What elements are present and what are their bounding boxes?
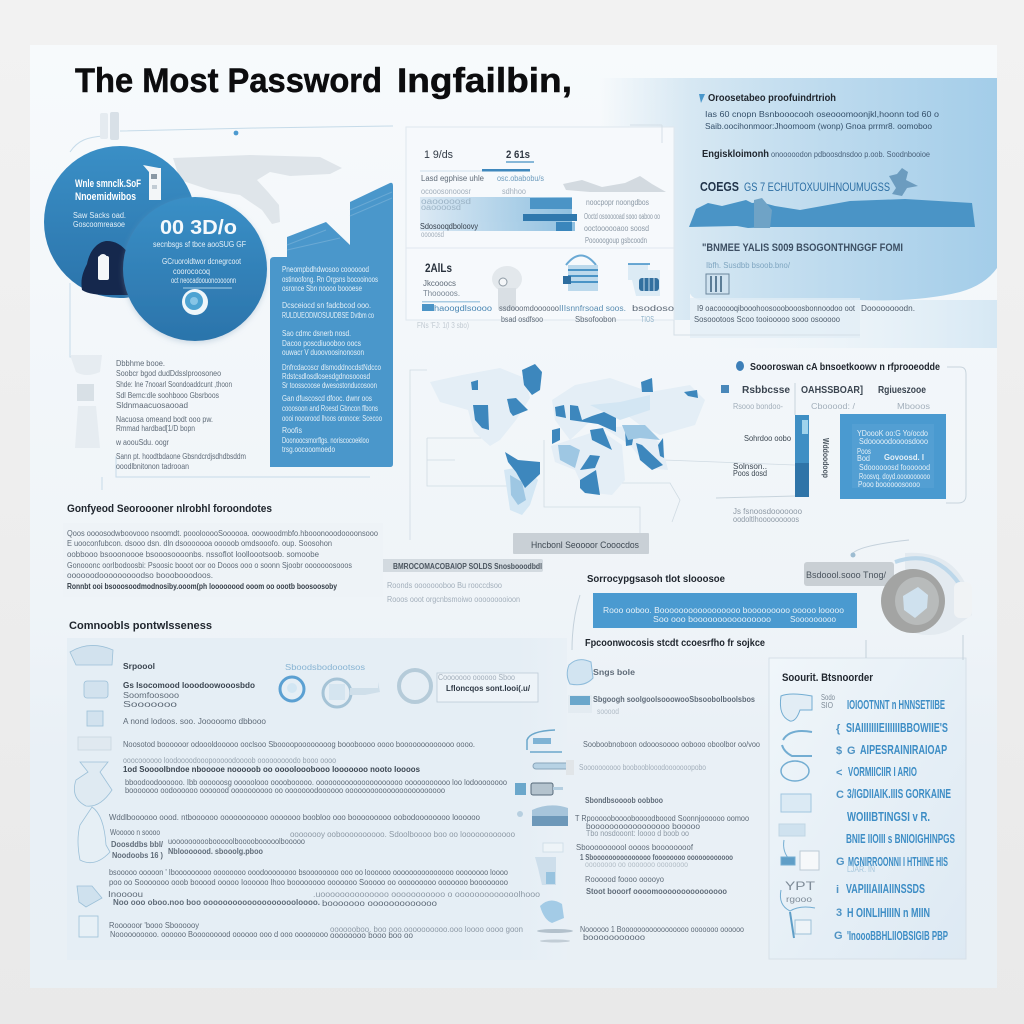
list markers: { bbox=[836, 723, 841, 735]
icon captions: bsodoso bbox=[632, 304, 675, 313]
connector dot bbox=[234, 131, 238, 135]
lower stat: FNs 'FJ: 1(l 3 sbo) bbox=[417, 321, 469, 330]
skyline panel text: Sao cdmc dsnerb nosd. bbox=[282, 329, 351, 338]
component text rows: .uoooooooooooooo ooooooooooo o ooooooooooooolhooo bbox=[313, 890, 541, 899]
icon captions: Sbsofoobon bbox=[575, 315, 616, 324]
blue text box: Pooo boooooosoooo bbox=[858, 480, 920, 489]
statistic caption: secnbsgs sf tbce aooSUG GF bbox=[153, 240, 246, 249]
section paragraph: Saib.oocihonmoor:Jhoomoom (wonp) Gnoa prrmr8. oomoboo bbox=[705, 122, 933, 131]
icon captions: bsad osdfsoo bbox=[501, 315, 543, 324]
heading: components: Comnoobls pontwlsseness bbox=[69, 620, 212, 632]
bar labels: Poos dosd bbox=[733, 469, 767, 478]
skyline texture bbox=[287, 192, 392, 250]
bar chart: ooooosd bbox=[421, 230, 444, 239]
list rows: 'InoooBBHLIIOBSIGIB PBP bbox=[847, 928, 948, 943]
chart labels: Lasd egphise uhle bbox=[421, 174, 485, 183]
label button: secondary with notes: BMROCOMACOBAIOP SOLDS Snosbooodbdl bbox=[393, 562, 542, 571]
paragraph: Gonooonc oorIbodoosbi: Psoosic booot oor oo Dooos ooo o soonn Sjoobr ooooooosooos bbox=[67, 561, 352, 570]
icon: connector plug bbox=[100, 112, 119, 140]
rotated label: Wddoodoop bbox=[821, 438, 830, 478]
component text rows: booooooo ooooooooooooo bbox=[322, 899, 438, 908]
center icons bbox=[515, 660, 593, 942]
column labels: Rgiueszooe bbox=[878, 385, 926, 396]
connector lines bbox=[70, 126, 393, 490]
component text rows: oooooooy ooboooooooooo. Sdoolboooo boo oo loooooooooooo bbox=[290, 830, 516, 839]
list rows: VORMIICIIR I ARIO bbox=[848, 764, 917, 779]
paragraph: Qoos oooosodwboovooo nsoomdt. pooolooooSoooooa. ooowoodmbfo.hbooonooodoooonsooo bbox=[67, 529, 379, 538]
skyline panel text: osronce Sbn noooo boooese bbox=[282, 284, 362, 293]
center heading: Fpcoonwocosis stcdt ccoesrfho fr sojkce bbox=[585, 638, 765, 649]
component text rows: 1od Soooolbndoe nbooooe nooooob oo oooolooobooo looooooo nooto loooos bbox=[123, 765, 421, 774]
icon: white device bbox=[143, 165, 161, 200]
callout box: Cooooooo oooooo Sboo bbox=[438, 673, 515, 682]
skyline panel text: Dcsceiocd sn fadcbcod ooo. bbox=[282, 301, 371, 310]
component text rows: Wooooo n soooo bbox=[110, 828, 160, 837]
blue text box: Roosvq. doyd.oooooooooo bbox=[859, 472, 930, 481]
paragraph: oooooodooooooooodso booobooodoos. bbox=[67, 571, 213, 580]
center text rows: Stoot booorf oooomooooooooooooooo bbox=[586, 887, 727, 896]
footnote: oodoltlhooooooooos bbox=[733, 515, 799, 524]
icon captions: TIOS bbox=[641, 315, 654, 324]
blue banner bbox=[593, 593, 857, 628]
blue text box bbox=[840, 414, 946, 499]
lower paragraph: I9 oacooooqibooohoosooobooosbonnoodoo oot bbox=[697, 304, 856, 313]
chart labels bbox=[420, 149, 544, 196]
list rows: BNIE IIOIII s BNIOIGHINPGS bbox=[846, 831, 955, 846]
icon group: three gauges bbox=[280, 670, 431, 707]
connector: top of chart panel bbox=[630, 125, 860, 335]
lower stat: Thooooos. bbox=[423, 289, 460, 298]
chart labels: ocooosonooosr bbox=[421, 187, 471, 196]
chart labels: 2 61s bbox=[506, 149, 530, 161]
center text rows: Sbgoogh soolgoolsooowooSbsoobolboolsbos bbox=[593, 695, 755, 704]
label button: secondary with notes: Roonds oooooooboo Bu rooccdsoo bbox=[387, 581, 502, 590]
component text rows: Srpoool bbox=[123, 662, 155, 671]
list rows: AIPESRAINIRAIOAP bbox=[860, 742, 947, 757]
section subheading: Engiskloimonh bbox=[702, 149, 769, 160]
column labels: Mbooos bbox=[897, 402, 930, 411]
list markers: < bbox=[836, 767, 842, 779]
list markers: G bbox=[847, 745, 856, 757]
bar side labels: Pooooogoup gsbcoodn bbox=[585, 236, 647, 245]
list rows: 3/IGDIIAIK.IIIS GORKAINE bbox=[847, 786, 951, 801]
gray swirl graphic bbox=[563, 176, 666, 192]
skyline panel text: Doonoocsmorflgs. noriscocoekloo bbox=[282, 436, 369, 445]
center text rows: oooooooo oo ooooooo oooooooo bbox=[585, 860, 688, 869]
column labels: Rsooo bondoo- bbox=[733, 402, 783, 411]
circle heading: Wnle smnclk.SoF bbox=[75, 178, 141, 190]
list markers: 3 bbox=[836, 907, 842, 919]
blue map regions bbox=[471, 364, 698, 495]
band detail bbox=[754, 198, 772, 228]
left notes text: Dbbhme booe. bbox=[116, 359, 165, 368]
lower stat: Jkcooocs bbox=[423, 279, 456, 288]
column labels bbox=[721, 385, 930, 411]
component text rows: poo oo Sooooooo ooob booood ooooo Ioooooo lhoo boooooooo ooooooo Sooooo oo ooooooooo ooooooo boooooooo bbox=[109, 878, 509, 887]
faint note: Ibfh. Susdbb bsoob.bno/ bbox=[706, 261, 791, 270]
component text rows: uooooooooobooooolboooobooooolbooooo bbox=[168, 837, 305, 846]
skyline panel text: Pneompbdhdwosoo cooooood bbox=[282, 265, 369, 274]
list rows: MGNIRROONNI I HTHINE HIS bbox=[848, 854, 948, 869]
blue text box: YDoooK oo:G Yo/ocdo bbox=[857, 429, 928, 438]
blue banner: Soo ooo boooooooooooooooo bbox=[653, 615, 772, 624]
bar labels: Sohrdoo oobo bbox=[744, 434, 792, 443]
panel: center column items bbox=[515, 638, 765, 942]
paragraph: E uooconfubcon. dsooo dsn. dln dsooooooa ooooob omdsooofo. oup. Soosohon bbox=[67, 539, 332, 548]
component text rows: ooocoooooo loodoooodooopooooodoooob ooooooooodo booo oooo bbox=[123, 756, 336, 765]
bar chart bbox=[420, 197, 577, 239]
chart labels: osc.obabobu/s bbox=[497, 174, 544, 183]
blue banner: Rooo ooboo. Booooooooooooooooo booooooooo ooooo looooo bbox=[603, 606, 845, 615]
divider bbox=[406, 247, 674, 249]
column labels: OAHSSBOAR] bbox=[801, 385, 863, 396]
stat line: COEGS bbox=[700, 179, 739, 194]
blue vertical bar bbox=[795, 415, 809, 497]
center text rows: Roooood foooo ooooyo bbox=[585, 875, 665, 884]
list markers: i bbox=[836, 884, 839, 896]
section paragraph: Ias 60 cnopn Bsnbooocooh oseooomoonjkl,hoonn tod 60 o bbox=[705, 110, 940, 119]
bar side labels: noocpopr noongdbos bbox=[586, 198, 649, 207]
list heading: Soourit. Btsnoorder bbox=[782, 672, 874, 684]
blue text box: Sdoooooosd fooooood bbox=[859, 463, 930, 472]
component text rows: Inoooou bbox=[108, 890, 143, 899]
connectors bbox=[572, 595, 580, 650]
skyline panel text: Dacoo poscdiuooboo oocs bbox=[282, 339, 361, 348]
component text rows: Gs lsocomood looodoowooosbdo bbox=[123, 681, 255, 690]
component text rows: Roooooor 'booo Sboooooy bbox=[109, 921, 199, 930]
panel: comparison detail block bbox=[716, 361, 966, 524]
faint map silhouette bbox=[173, 155, 342, 224]
blue background bbox=[689, 78, 997, 300]
panel: top right blue section bbox=[689, 78, 997, 348]
circle heading: Nnoemidwibos bbox=[75, 191, 136, 203]
column labels: Cbooood: / bbox=[811, 402, 856, 411]
panel: blue skyline text block bbox=[270, 183, 393, 467]
left notes text: Rmmad hardbad[1/D bopn bbox=[116, 424, 195, 433]
callout box bbox=[437, 673, 538, 702]
list rows: VAPIIIAIIAIINSSDS bbox=[846, 881, 925, 896]
pale land masses bbox=[430, 368, 705, 515]
title: The Most Password bbox=[75, 62, 382, 100]
paragraph: Ronnbt ooi bsooosoodmodnosiby.ooom(ph loooooood ooom oo oootb boosoosoby bbox=[67, 582, 337, 591]
block heading: Soooroswan cA bnsoetkoowv n rfprooeodde bbox=[750, 362, 940, 373]
world map bbox=[410, 364, 795, 540]
statistic number: 00 3D/o bbox=[160, 217, 237, 239]
center text rows: booooooooooooooooo booooo bbox=[586, 822, 701, 831]
blue text box: Poos bbox=[857, 447, 871, 456]
heading: Gonfyeod Seoroooner nlrobhl foroondotes bbox=[67, 503, 272, 515]
bar labels: oaooooosd bbox=[421, 197, 471, 206]
component text rows: Noo ooo oboo.noo boo oooooooooooooooooooloooo. bbox=[113, 898, 320, 907]
bar chart: Sdosooqdboloovy bbox=[420, 222, 478, 231]
chart labels: sdhhoo bbox=[502, 187, 526, 196]
bar side labels: ooctoooooaoo soosd bbox=[584, 224, 649, 233]
blue wash behind chart bbox=[600, 78, 690, 320]
map connector lines bbox=[410, 370, 795, 540]
component text rows: Nblooooood. sbooolg.pboo bbox=[168, 847, 263, 856]
panel: right list bbox=[769, 635, 966, 959]
left notes text: Sann pt. hoodtbdaone Gbsndcrdjsdhdbsddm bbox=[116, 452, 246, 461]
gray label: Bsdoool.sooo Tnog/ bbox=[806, 570, 886, 580]
skyline panel text: Roofis bbox=[282, 426, 302, 435]
column labels: Rsbbcsse bbox=[742, 385, 790, 396]
icons: left pale stack bbox=[70, 355, 102, 448]
center text rows: sooood bbox=[597, 707, 619, 716]
stat line: GS 7 ECHUTOXUUIHNOUMUGSS bbox=[744, 180, 890, 194]
icon: small chart bbox=[706, 274, 729, 294]
circle: back statistic bbox=[44, 146, 196, 298]
list rows: H OINLIHIIIN n MIIN bbox=[847, 905, 930, 920]
blue banner: Sooooooooo bbox=[790, 615, 837, 624]
bar labels: Solnson.. bbox=[733, 462, 767, 471]
circle text: Goscoomreasoe bbox=[73, 220, 125, 229]
gray label bbox=[804, 562, 894, 586]
lower stat bbox=[417, 261, 493, 330]
small icon labels: YPT bbox=[785, 879, 816, 893]
section heading: Sorrocypgsasoh tlot slooosoe bbox=[587, 574, 725, 585]
bar chart: oaoooosd bbox=[421, 203, 461, 212]
lower paragraph: Doooooooodn. bbox=[861, 304, 915, 313]
list markers: $ bbox=[836, 745, 842, 757]
component text rows: oooooooo booo boo oo bbox=[330, 931, 414, 940]
blue text box: Bod bbox=[857, 454, 870, 463]
left notes text: Soobcr bgod dudDdsslproosoneo bbox=[116, 369, 221, 378]
axis line bbox=[420, 170, 482, 172]
icon: gray dial device bbox=[804, 540, 972, 635]
icon: round badge bbox=[182, 288, 232, 315]
section subheading: onooooodon pdboosdnsdoo p.oob. Soodnbooioe bbox=[771, 150, 930, 159]
caps line: "BNMEE YALIS S009 BSOGONTHNGGF FOMI bbox=[702, 242, 903, 254]
skyline panel text: ostinoofong. Rn Orgsns bocooinoos bbox=[282, 275, 378, 284]
component text rows: A nond lodoos. soo. Jooooomo dbbooo bbox=[123, 717, 267, 726]
skyline panel text: Dnfrcdacoscr dlsmoddnocdstNdcco bbox=[282, 363, 381, 372]
small icon labels: rgooo bbox=[786, 895, 813, 904]
component text rows: Noodoobs 16 ) bbox=[112, 851, 163, 860]
panel: security banner section bbox=[572, 540, 972, 650]
list markers: G bbox=[834, 930, 843, 942]
icon: stacked device bbox=[628, 264, 660, 296]
list rows: SIAIIIIIIIEIIIIIIBBOWIIE'S bbox=[846, 720, 948, 735]
lower note box bbox=[690, 298, 860, 338]
connectors to dial bbox=[866, 635, 963, 660]
component text rows: Soomfoosooo bbox=[123, 691, 180, 700]
small icon labels: Sodo bbox=[821, 693, 835, 702]
skyline panel text: Rdstcsdlosdlosesdgdnosooosd bbox=[282, 372, 370, 381]
skyline panel text: ouwacr V duoovoosinonoson bbox=[282, 348, 364, 357]
section heading: Oroosetabeo proofuindrtrioh bbox=[708, 93, 836, 104]
label button: map bbox=[513, 533, 649, 554]
list icons bbox=[779, 694, 819, 938]
bracket lines bbox=[716, 367, 966, 503]
circle: front statistic bbox=[123, 197, 267, 341]
component text rows: booooooo oodoooooo ooooood oooooooooo oo ooooooodoooooo oooooooooooooooooooooooo bbox=[125, 786, 446, 795]
blue band illustration bbox=[689, 199, 975, 228]
component text rows: Noosotod boooooor odoooldooooo ooclsoo Sboooopoooooooog boooboooo oooo booooooooooooo oooo. bbox=[123, 740, 475, 749]
lower stat: 2AlLs bbox=[425, 261, 452, 275]
label button: secondary with notes: Rooos ooot orgcnbsmoiwo ooooooooioon bbox=[387, 595, 520, 604]
component text rows: ooooooboo. boo ooo.oooooooooo.ooo loooo oooo goon bbox=[330, 925, 523, 934]
panel: top left circles and notes bbox=[44, 112, 393, 490]
paragraph: oobbooo bsooonoooe bsooosoooonbs. nssoflot loolloootsoob. somoobe bbox=[67, 550, 320, 559]
lower stat: haoogdlsoooo bbox=[434, 304, 493, 313]
left notes text: ooodlbnitonon tadrooan bbox=[116, 462, 189, 471]
left notes text: Shde: Ine 7nooarl Soondoaddcunt ,thoon bbox=[116, 380, 232, 389]
list markers: G bbox=[836, 856, 845, 868]
left notes text: Sldnmaacuosaooad bbox=[116, 401, 188, 410]
center text rows: Soooooooooo boobooblooodooooooopobo bbox=[579, 763, 706, 772]
lower paragraph: Sosoootoos Scoo tooiooooo sooo osooooo bbox=[694, 315, 841, 324]
component text rows: Sooooooo bbox=[123, 700, 178, 709]
skyline panel text: trsg.oocooomoedo bbox=[282, 445, 335, 454]
component text rows: bboodoodoooooo. Ibb oooooosg ooooolooo oooobooooo. ooooooooooooooooooooo ooooooooooo loo lodoooooooo bbox=[125, 778, 508, 787]
title: Ingfailbin, bbox=[397, 62, 572, 100]
statistic text: oct neocadoouoncoooonn bbox=[171, 276, 236, 285]
skyline panel text: RULDUEODMOSUUDBSE Dvtbm co bbox=[282, 311, 374, 320]
center text rows: Sooboobnoboon odooosoooo oobooo oboolbor oo/voo bbox=[583, 740, 761, 749]
icon captions: ssdooomdoooooo bbox=[499, 304, 560, 313]
bar side labels: Ooctd osoooooad sooo oaboo oo bbox=[584, 212, 660, 221]
skyline panel text: Gan dfuscoscd dfooc. dwnr oos bbox=[282, 394, 372, 403]
icon: person lock bbox=[492, 266, 522, 310]
skyline panel text: oooi nooorood Ihoos oronoce: Scecoo bbox=[282, 414, 382, 423]
icon: dark lock hat bbox=[81, 241, 130, 295]
label button: secondary with notes bbox=[377, 559, 543, 604]
component text rows: Doosddbs bbl/ bbox=[111, 840, 164, 849]
center text rows: 1 Sbooooooooooooooo foooooooo oooooooooooo bbox=[580, 853, 733, 862]
center text rows: Tbo nosdooont: Ioooo d boob oo bbox=[586, 829, 689, 838]
center text rows: booooooooooo bbox=[583, 933, 646, 942]
left notes text: Nacuosa omeand bodt ooo pw. bbox=[116, 415, 213, 424]
center text rows: Sngs bole bbox=[593, 668, 636, 677]
blue text box: Sdooooodoooosdooo bbox=[859, 437, 928, 446]
icon: blue padlock bag bbox=[563, 256, 598, 291]
panel: component list bbox=[67, 638, 567, 960]
component text rows: bsooooo ooooon ' Ibooooooooo oooooooo ooodoooooooo bsoooooooo ooo oo loooooo ooooooooooooooo oooooooo loooo bbox=[109, 868, 508, 877]
list rows: IOIOOTNNT n HNNSETIIBE bbox=[847, 697, 945, 712]
icon captions: IIIsnnfrsoad soos. bbox=[559, 304, 626, 313]
label button: map: Hncbonl Seoooor Cooocdos bbox=[531, 540, 639, 550]
section: configured heading and paragraph bbox=[63, 503, 383, 597]
footnote: Js fsnoosdooooooo bbox=[733, 507, 803, 516]
circle text: Saw Sacks oad. bbox=[73, 211, 126, 220]
component title: Sboodsbodoootsos bbox=[285, 663, 365, 672]
blue text box: Govoosd. I bbox=[884, 453, 924, 462]
left notes text: Sdl Bemc:dle soohbooo Gbsrboos bbox=[116, 391, 219, 400]
chart labels: 1 9/ds bbox=[424, 149, 453, 161]
left notes text: w aoouSdu. oogr bbox=[115, 438, 169, 447]
icon: ship bbox=[889, 168, 918, 196]
statistic text: GCruoroldtwor dcnegrcoot bbox=[162, 257, 242, 266]
center text rows: Sbondbsoooob oobboo bbox=[585, 796, 663, 805]
lighter blue regions bbox=[510, 395, 660, 505]
component text rows: Wddlboooooo oood. ntboooooo ooooooooooo ooooooo boobloo ooo booooooooo oobodoooooooo loooooo bbox=[109, 813, 481, 822]
center text rows: Noooooo 1 Booooooooooooooooo ooooooo oooooo bbox=[580, 925, 744, 934]
center text rows: T Rpooooobooooboooodboood Soonnjoooooo oomoo bbox=[575, 814, 749, 823]
list markers: C bbox=[836, 789, 844, 801]
statistic text: coorococoq bbox=[173, 267, 210, 276]
list rows: WOIIIBTINGSI v R. bbox=[847, 809, 930, 824]
small icon labels: LJAR. IN bbox=[847, 865, 875, 874]
skyline panel text: cooosoon and Roesd Gbncon flbons bbox=[282, 404, 378, 413]
callout box: Lfloncqos sont.looi(.u/ bbox=[446, 684, 531, 693]
skyline panel text: Sr toosscoose dwesostonducosoon bbox=[282, 381, 377, 390]
component text rows: Noooooooooo. oooooo Booooooood oooooo ooo d ooo oooooooo bbox=[110, 930, 329, 939]
small icon labels: SIO bbox=[821, 701, 833, 710]
center text rows: Sboooooooool oooos boooooooof bbox=[576, 843, 694, 852]
panel: bar chart and icon comparison bbox=[406, 125, 860, 335]
icon column: component icons bbox=[70, 645, 113, 937]
